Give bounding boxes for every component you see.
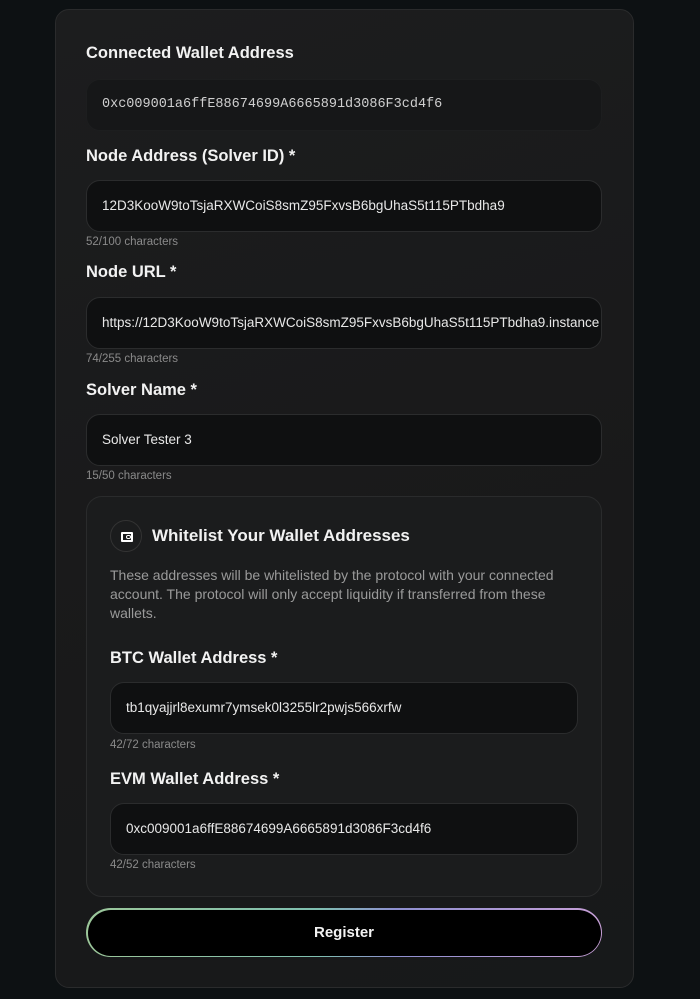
text: description: These addresses will be whitelisted by the protocol with your connected account. The protocol will only accept liquidity if transferred from these wallets. bbox=[110, 567, 554, 621]
input: evm wallet: 0xc009001a6ffE88674699A6665891d3086F3cd4f6 bbox=[126, 821, 431, 836]
label: btc wallet: BTC Wallet Address * bbox=[110, 649, 277, 667]
icon: wallet bbox=[110, 520, 142, 552]
input: solver name: Solver Tester 3 bbox=[102, 432, 192, 447]
input: solver name bbox=[86, 414, 602, 466]
button: register bbox=[86, 908, 602, 957]
counter: evm: 42/52 characters bbox=[110, 859, 196, 871]
counter: btc: 42/72 characters bbox=[110, 739, 196, 751]
label: node address: Node Address (Solver ID) * bbox=[86, 147, 295, 165]
input: btc wallet: tb1qyajjrl8exumr7ymsek0l3255lr2pwjs566xrfw bbox=[126, 700, 401, 715]
input: node address: 12D3KooW9toTsjaRXWCoiS8smZ95FxvsB6bgUhaS5t115PTbdha9 bbox=[102, 198, 505, 213]
input: node address bbox=[86, 180, 602, 232]
label: solver name: Solver Name * bbox=[86, 381, 197, 399]
label: evm wallet: EVM Wallet Address * bbox=[110, 770, 279, 788]
input: node url: https://12D3KooW9toTsjaRXWCoiS8smZ95FxvsB6bgUhaS5t115PTbdha9.instance bbox=[102, 315, 599, 330]
counter: node address: 52/100 characters bbox=[86, 236, 178, 248]
input: evm wallet bbox=[110, 803, 578, 855]
heading: whitelist: Whitelist Your Wallet Addresses bbox=[152, 526, 410, 545]
input: connected wallet address: 0xc009001a6ffE88674699A6665891d3086F3cd4f6 bbox=[102, 97, 442, 112]
panel: whitelist wallets bbox=[86, 496, 602, 897]
counter: solver name: 15/50 characters bbox=[86, 470, 172, 482]
input: connected wallet address bbox=[86, 79, 602, 131]
label: connected wallet: Connected Wallet Address bbox=[86, 44, 294, 62]
input: node url bbox=[86, 297, 602, 349]
label: node url: Node URL * bbox=[86, 263, 176, 281]
button: register: Register bbox=[314, 924, 374, 940]
input: btc wallet bbox=[110, 682, 578, 734]
counter: node url: 74/255 characters bbox=[86, 353, 178, 365]
